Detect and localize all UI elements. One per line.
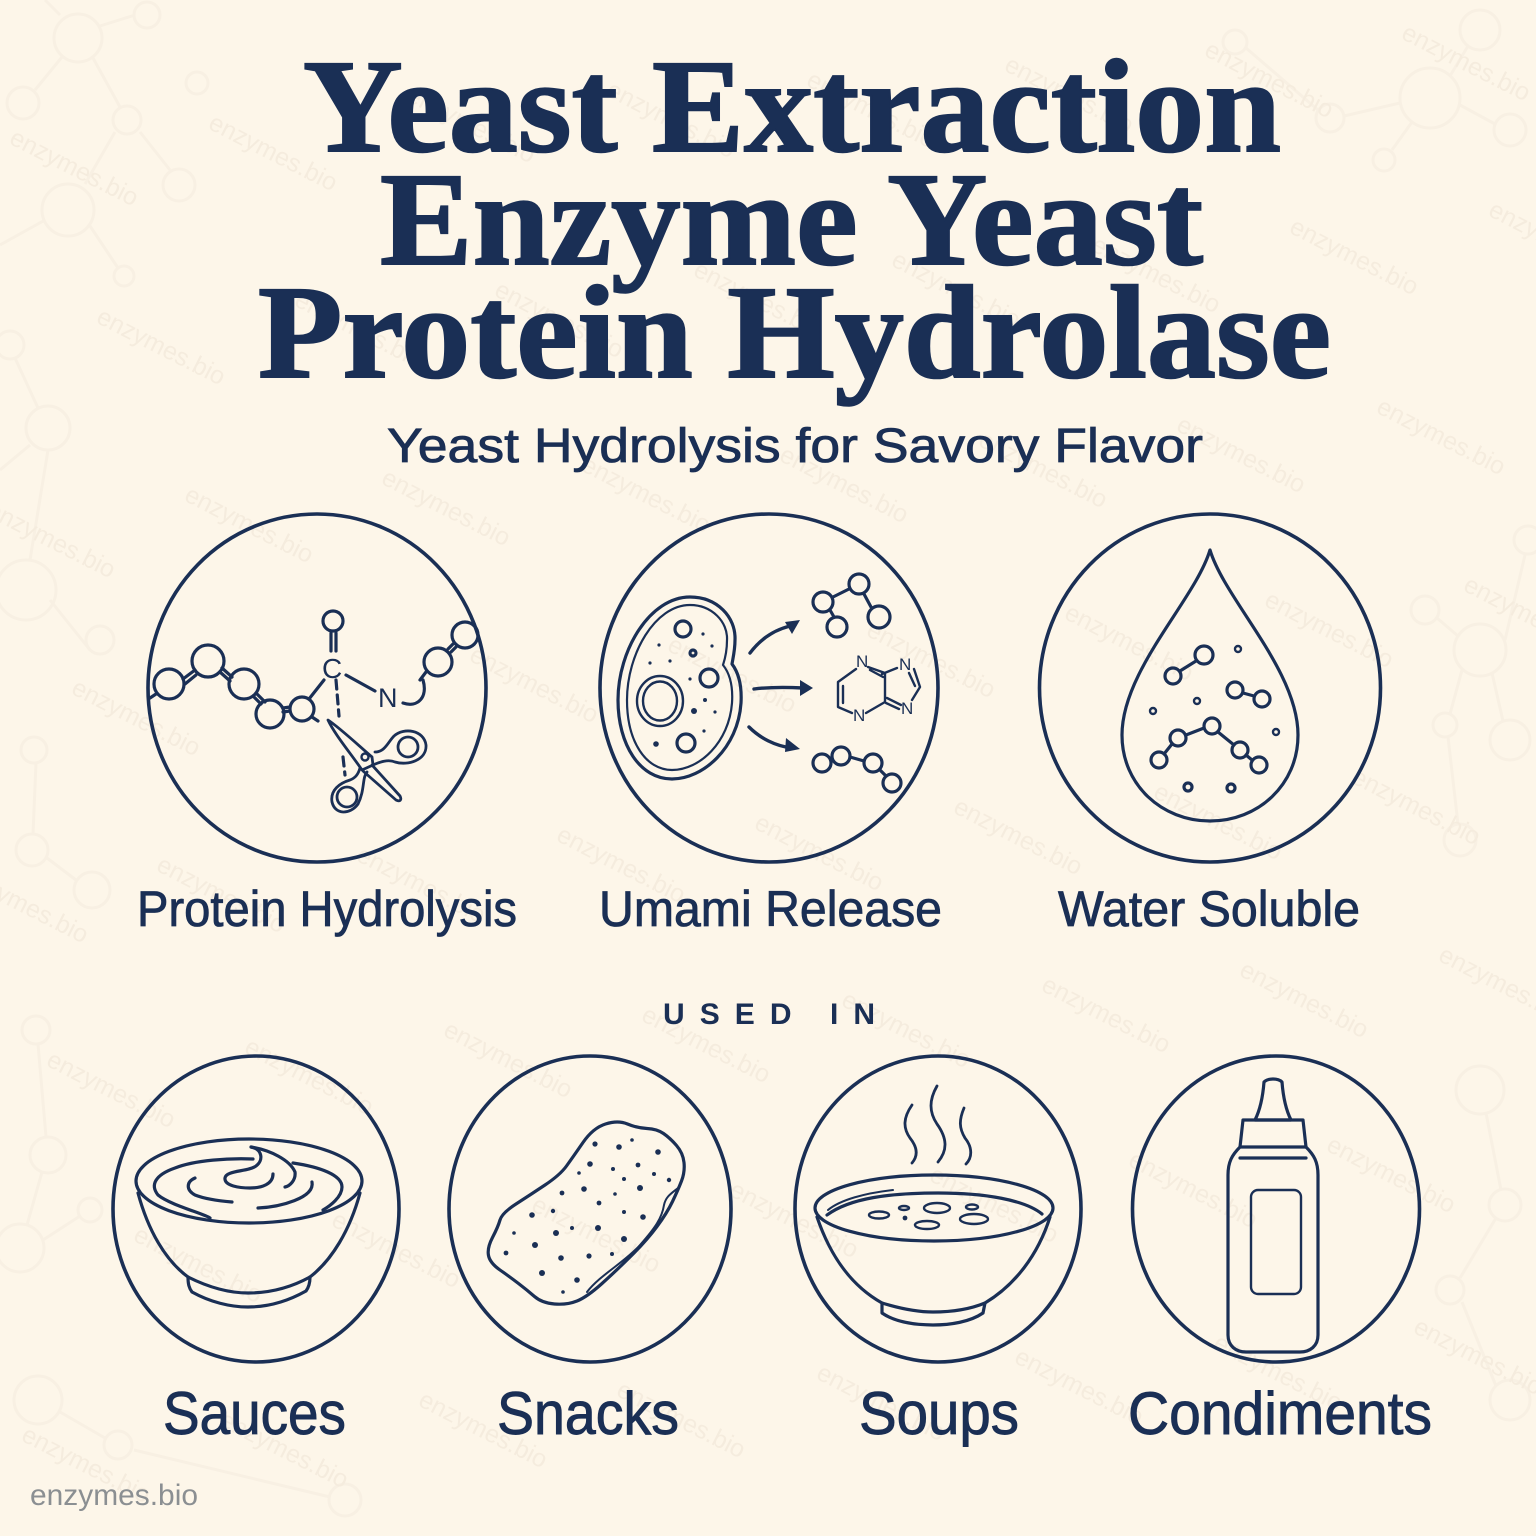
icon: yeast cell releasing molecules bbox=[600, 514, 938, 862]
label: Water Soluble bbox=[1058, 881, 1360, 937]
background: enzymes.bio watermarks: enzymes.bio bbox=[17, 1420, 155, 1509]
background: enzymes.bio watermarks: enzymes.bio bbox=[439, 1015, 577, 1104]
background: enzymes.bio watermarks: enzymes.bio bbox=[602, 75, 740, 164]
background: enzymes.bio watermarks: enzymes.bio bbox=[377, 463, 515, 552]
background: enzymes.bio watermarks: enzymes.bio bbox=[490, 275, 628, 364]
icon: yeast cell releasing molecules: N bbox=[853, 706, 865, 725]
label: Soups bbox=[859, 1380, 1019, 1447]
background: enzymes.bio watermarks: enzymes.bio bbox=[180, 480, 318, 569]
label: Condiments bbox=[1128, 1380, 1432, 1447]
icon: squeeze bottle bbox=[1132, 1056, 1420, 1362]
background: enzymes.bio watermarks: enzymes.bio bbox=[1397, 18, 1535, 107]
label: Protein Hydrolysis bbox=[137, 881, 517, 937]
background: enzymes.bio watermarks: enzymes.bio bbox=[1235, 955, 1373, 1044]
panel: water soluble bbox=[1040, 514, 1380, 937]
title: Protein Hydrolase bbox=[258, 258, 1331, 406]
background: enzymes.bio watermarks: enzymes.bio bbox=[725, 1175, 863, 1264]
icon: sauce bowl bbox=[113, 1056, 399, 1362]
icon: yeast cell releasing molecules: N bbox=[856, 652, 868, 671]
icon: yeast cell releasing molecules: N bbox=[901, 699, 913, 718]
background: enzymes.bio watermarks: enzymes.bio bbox=[1209, 1328, 1347, 1417]
panel: sauces bbox=[113, 1056, 399, 1447]
background: enzymes.bio watermarks: enzymes.bio bbox=[887, 245, 1025, 334]
background: enzymes.bio watermarks: enzymes.bio bbox=[1060, 598, 1198, 687]
background: enzymes.bio watermarks: enzymes.bio bbox=[663, 630, 801, 719]
background: enzymes.bio watermarks: enzymes.bio bbox=[1000, 50, 1138, 139]
icon: water drop with molecules bbox=[1040, 514, 1380, 862]
label: Snacks bbox=[497, 1380, 679, 1447]
background: enzymes.bio watermarks: enzymes.bio bbox=[129, 1220, 267, 1309]
background: enzymes.bio watermarks: enzymes.bio bbox=[42, 1045, 180, 1134]
title: Yeast Extraction bbox=[303, 32, 1281, 180]
background: enzymes.bio watermarks: enzymes.bio bbox=[402, 80, 540, 169]
brand watermark: enzymes.bio bbox=[30, 1479, 198, 1512]
background: enzymes.bio watermarks: enzymes.bio bbox=[240, 1032, 378, 1121]
background: enzymes.bio watermarks: enzymes.bio bbox=[1149, 777, 1287, 866]
background: enzymes.bio watermarks: enzymes.bio bbox=[290, 285, 428, 374]
small soup dot bbox=[903, 1216, 907, 1220]
background: enzymes.bio watermarks: enzymes.bio bbox=[1124, 1145, 1262, 1234]
icon: yeast cell releasing molecules: N bbox=[899, 655, 911, 674]
background: enzymes.bio watermarks: enzymes.bio bbox=[5, 123, 143, 212]
background: enzymes.bio watermarks: enzymes.bio bbox=[204, 108, 342, 197]
icon: protein chain and scissors: C bbox=[322, 653, 342, 684]
background: enzymes.bio watermarks: enzymes.bio bbox=[925, 1160, 1063, 1249]
panel: snacks bbox=[449, 1056, 731, 1447]
background: enzymes.bio watermarks: enzymes.bio bbox=[750, 808, 888, 897]
background: enzymes.bio watermarks: enzymes.bio bbox=[1037, 970, 1175, 1059]
background: enzymes.bio watermarks: enzymes.bio bbox=[1260, 585, 1398, 674]
label: Umami Release bbox=[599, 881, 942, 937]
background: enzymes.bio watermarks: enzymes.bio bbox=[1285, 212, 1423, 301]
title: Enzyme Yeast bbox=[380, 145, 1203, 293]
background: enzymes.bio watermarks: enzymes.bio bbox=[1372, 392, 1510, 481]
background: enzymes.bio watermarks: enzymes.bio bbox=[862, 615, 1000, 704]
background: enzymes.bio watermarks: enzymes.bio bbox=[1010, 1342, 1148, 1431]
icon: protein chain and scissors: N bbox=[378, 683, 398, 713]
background: enzymes.bio watermarks: enzymes.bio bbox=[67, 673, 205, 762]
background: enzymes.bio watermarks: enzymes.bio bbox=[612, 1375, 750, 1464]
panel: protein hydrolysis bbox=[137, 514, 517, 937]
section heading: used in: USED IN bbox=[663, 998, 875, 1031]
icon: protein chain and scissors bbox=[148, 514, 486, 862]
background: enzymes.bio watermarks: enzymes.bio bbox=[949, 792, 1087, 881]
background: enzymes.bio watermarks: enzymes.bio bbox=[1172, 410, 1310, 499]
label: Sauces bbox=[163, 1380, 346, 1447]
background: enzymes.bio watermarks: enzymes.bio bbox=[552, 820, 690, 909]
background: enzymes.bio watermarks: enzymes.bio bbox=[92, 302, 230, 391]
background: enzymes.bio watermarks: enzymes.bio bbox=[689, 255, 827, 344]
subtitle: Yeast Hydrolysis for Savory Flavor bbox=[387, 420, 1203, 473]
background: enzymes.bio watermarks: enzymes.bio bbox=[1347, 762, 1485, 851]
background: enzymes.bio watermarks: enzymes.bio bbox=[812, 1358, 950, 1447]
icon: snack chip bbox=[449, 1056, 731, 1362]
background: enzymes.bio watermarks: enzymes.bio bbox=[465, 640, 603, 729]
background: enzymes.bio watermarks: enzymes.bio bbox=[327, 1205, 465, 1294]
background: enzymes.bio watermarks: enzymes.bio bbox=[215, 1405, 353, 1494]
background: enzymes.bio watermarks: enzymes.bio bbox=[1087, 230, 1225, 319]
background: enzymes.bio watermarks: enzymes.bio bbox=[577, 450, 715, 539]
title bbox=[258, 32, 1331, 406]
background: enzymes.bio watermarks: enzymes.bio bbox=[1200, 35, 1338, 124]
background: enzymes.bio watermarks: enzymes.bio bbox=[974, 425, 1112, 514]
panel: soups bbox=[795, 1056, 1081, 1447]
background: enzymes.bio watermarks: enzymes.bio bbox=[775, 440, 913, 529]
panel: condiments bbox=[1128, 1056, 1432, 1447]
background: enzymes.bio watermarks: enzymes.bio bbox=[527, 1190, 665, 1279]
background: enzymes.bio watermarks: enzymes.bio bbox=[837, 985, 975, 1074]
panel: umami release bbox=[599, 514, 942, 937]
background: enzymes.bio watermarks: enzymes.bio bbox=[637, 1000, 775, 1089]
icon: soup bowl with steam bbox=[795, 1056, 1081, 1362]
background: enzymes.bio watermarks: enzymes.bio bbox=[352, 840, 490, 929]
background: enzymes.bio watermarks: enzymes.bio bbox=[414, 1385, 552, 1474]
background: enzymes.bio watermarks: enzymes.bio bbox=[1322, 1130, 1460, 1219]
background: enzymes.bio watermarks: enzymes.bio bbox=[152, 850, 290, 939]
background: enzymes.bio watermarks: enzymes.bio bbox=[802, 65, 940, 154]
